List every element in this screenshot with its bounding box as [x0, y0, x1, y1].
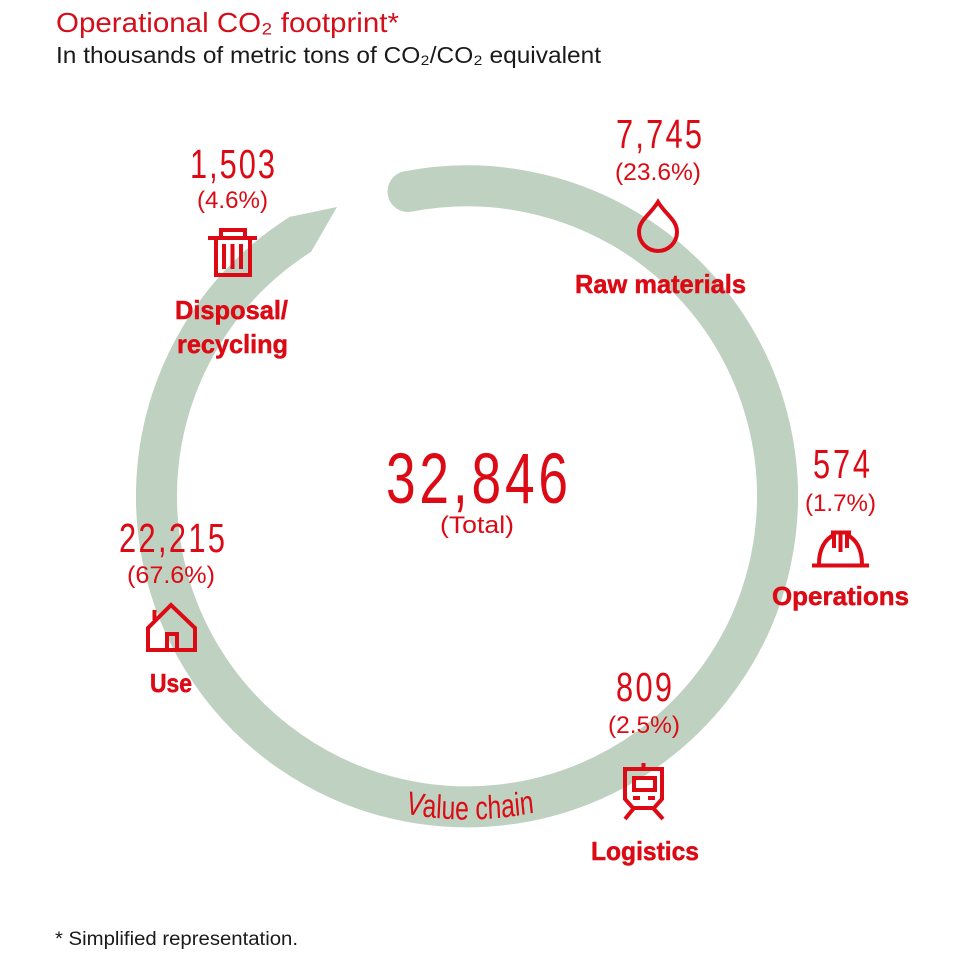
ring label: value chain: Value chain	[410, 792, 533, 820]
segment: disposal / recycling: Disposal/	[175, 295, 288, 325]
segment: raw materials: 7,745	[616, 111, 702, 157]
total: (Total)	[440, 512, 514, 539]
segment: use	[119, 515, 225, 698]
segment: disposal / recycling	[175, 141, 288, 359]
segment: logistics: (2.5%)	[608, 712, 680, 739]
segment: operations: (1.7%)	[805, 490, 876, 517]
icon: train	[625, 763, 663, 819]
icon: hard hat	[812, 532, 869, 566]
ring label: value chain	[410, 792, 533, 820]
segment: disposal / recycling: 1,503	[190, 141, 275, 187]
segment: raw materials: Raw materials	[575, 269, 746, 299]
icon: trash bin	[208, 230, 257, 275]
segment: raw materials: (23.6%)	[615, 159, 701, 186]
segment: disposal / recycling: recycling	[177, 329, 288, 359]
segment: operations: 574	[813, 441, 870, 487]
segment: raw materials	[575, 111, 746, 299]
segment: operations: Operations	[772, 581, 909, 611]
footnote: * Simplified representation.	[55, 929, 298, 950]
segment: logistics	[591, 664, 699, 866]
total: 32,846	[386, 440, 568, 519]
segment: operations	[772, 441, 909, 611]
icon: house	[148, 605, 195, 650]
segment: logistics: Logistics	[591, 836, 699, 866]
segment: use: (67.6%)	[127, 562, 215, 589]
icon: water drop	[639, 202, 677, 251]
segment: logistics: 809	[616, 664, 672, 710]
value chain ring arrow	[156, 171, 777, 807]
segment: use: 22,215	[119, 515, 225, 561]
subtitle: In thousands of metric tons of CO₂/CO₂ equivalent	[56, 42, 602, 68]
segment: disposal / recycling: (4.6%)	[197, 187, 268, 214]
segment: use: Use	[150, 668, 192, 698]
title: Operational CO₂ footprint*	[56, 7, 399, 38]
